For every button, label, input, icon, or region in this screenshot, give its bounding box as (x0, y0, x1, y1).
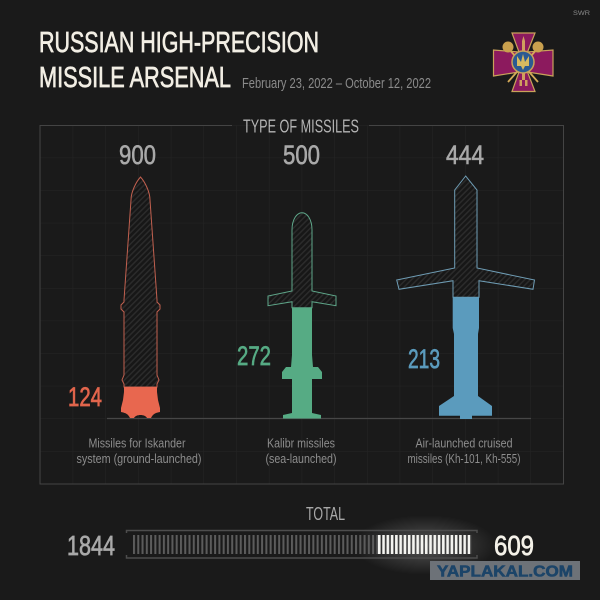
icon: military emblem (494, 33, 553, 92)
caption: Iskander: system (ground-launched) (76, 451, 202, 466)
missile outline (397, 176, 534, 297)
missile fill (439, 297, 492, 419)
date range: February 23, 2022 – October 12, 2022 (242, 75, 431, 92)
missile: Iskander (121, 177, 160, 418)
hit count: 272: 272 (237, 341, 271, 371)
caption: air-launched: Air-launched cruised (416, 436, 512, 450)
total count: 500: 500 (283, 140, 320, 170)
watermark: YAPLAKAL.COM (437, 564, 573, 580)
total count: 900: 900 (119, 140, 156, 170)
title: MISSILE ARSENAL (39, 62, 231, 94)
glow (353, 515, 497, 575)
caption: Iskander (76, 436, 202, 466)
total hit: 609: 609 (494, 530, 534, 561)
caption: Iskander: Missiles for Iskander (88, 436, 186, 450)
total launched: 1844: 1844 (67, 530, 115, 561)
hit ticks (378, 535, 472, 554)
missile: Kalibr (268, 213, 336, 418)
caption: Kalibr (266, 436, 336, 466)
caption: Kalibr: Kalibr missiles (267, 436, 335, 450)
credit mark: SWR (573, 10, 590, 17)
title (39, 27, 319, 94)
total heading: TOTAL (306, 503, 345, 524)
caption: air-launched (408, 436, 520, 466)
missile outline (121, 177, 160, 387)
total count: 444: 444 (446, 140, 484, 170)
hit count: 124: 124 (68, 382, 102, 412)
caption: Kalibr: (sea-launched) (266, 451, 336, 466)
baseline (107, 418, 531, 420)
hit count: 213: 213 (408, 344, 440, 374)
title: RUSSIAN HIGH-PRECISION (39, 27, 319, 59)
total progress bar (126, 515, 497, 575)
caption: air-launched: missiles (Kh-101, Kh-555) (408, 451, 520, 466)
panel heading: TYPE OF MISSILES (243, 116, 359, 136)
missile fill (282, 308, 322, 418)
missile fill (121, 387, 160, 418)
missile outline (268, 213, 336, 308)
bar frame (126, 530, 477, 558)
launched ticks (133, 535, 378, 554)
missile: air-launched cruise (397, 176, 534, 419)
